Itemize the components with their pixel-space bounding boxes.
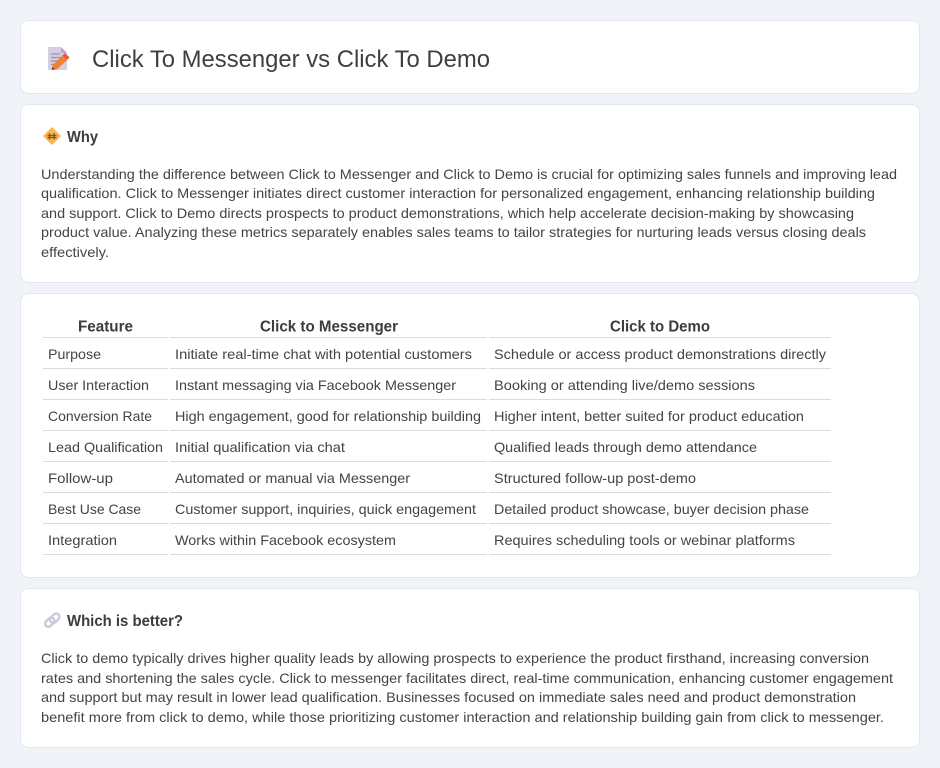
table row: conversion rate	[43, 408, 831, 430]
text block: why explanation	[41, 166, 897, 260]
table row: user interaction: User Interaction	[48, 377, 149, 393]
table row: follow-up: Automated or manual via Messenger	[175, 470, 410, 486]
table row: integration: Integration	[48, 532, 117, 548]
table row: user interaction: Booking or attending live/demo sessions	[494, 377, 755, 393]
table row: lead qualification: Initial qualification via chat	[175, 439, 345, 455]
heading: which is better: Which is better?	[67, 613, 183, 630]
table row: integration: Works within Facebook ecosystem	[175, 532, 396, 548]
table row: conversion rate: Higher intent, better suited for product education	[494, 408, 804, 424]
table row: conversion rate: Conversion Rate	[48, 408, 152, 424]
table header row: Click to Messenger	[260, 318, 398, 336]
text block: why explanation: Understanding the difference between Click to Messenger and Click to Demo is crucial for optimizing sales funnels and improving lead	[41, 166, 897, 182]
title: Click To Messenger vs Click To Demo	[92, 46, 490, 73]
table row: lead qualification	[43, 439, 831, 462]
table header row	[43, 318, 831, 338]
table row: follow-up: Follow-up	[48, 470, 113, 486]
table row: best use case	[43, 501, 831, 524]
text block: why explanation: effectively.	[41, 244, 109, 260]
text block: why explanation: product value. Analyzing these metrics separately enables sales teams to tailor strategies for nurturing leads versus closing deals	[41, 224, 866, 240]
table row: user interaction: Instant messaging via Facebook Messenger	[175, 377, 456, 393]
text block: verdict: benefit more from click to demo, while those prioritizing customer interaction and relationship building gain from click to messenger.	[41, 709, 884, 725]
table header row: Click to Demo	[610, 318, 710, 336]
table row: follow-up	[43, 470, 831, 492]
text block: verdict: and support but may result in lower lead qualification. Businesses focused on immediate sales need and product demonstration	[41, 689, 856, 705]
panel: which is better	[20, 588, 920, 748]
table row: follow-up: Structured follow-up post-demo	[494, 470, 696, 486]
icon: chain link	[44, 612, 61, 628]
table row: best use case: Customer support, inquiries, quick engagement	[175, 501, 476, 517]
panel: title header	[20, 20, 920, 94]
panel: why	[20, 104, 920, 282]
panel: comparison table	[20, 294, 920, 578]
text block: verdict	[41, 650, 893, 725]
table row: purpose: Schedule or access product demonstrations directly	[494, 346, 826, 362]
table row: purpose: Purpose	[48, 346, 101, 362]
table row: lead qualification: Lead Qualification	[48, 439, 163, 455]
table row: integration: Requires scheduling tools or webinar platforms	[494, 532, 795, 548]
table header row: Feature	[78, 318, 133, 336]
icon: document with pencil	[48, 47, 70, 70]
table row: conversion rate: High engagement, good for relationship building	[175, 408, 481, 424]
table row: lead qualification: Qualified leads through demo attendance	[494, 439, 757, 455]
text block: verdict: Click to demo typically drives higher quality leads by allowing prospects to experience the product firsthand, increasing conversion	[41, 650, 869, 666]
text block: why explanation: qualification. Click to Messenger initiates direct customer interaction for personalized engagement, enhancing relationship building	[41, 185, 875, 201]
table row: user interaction	[43, 377, 831, 400]
icon: diamond road sign	[44, 128, 60, 144]
table row: integration	[43, 532, 831, 554]
table row: best use case: Best Use Case	[48, 501, 141, 517]
table row: best use case: Detailed product showcase, buyer decision phase	[494, 501, 809, 517]
table row: purpose	[43, 346, 831, 368]
text block: why explanation: and support. Click to Demo directs prospects to product demonstrations, which help accelerate decision-making by showcasing	[41, 205, 854, 221]
text block: verdict: rates and shortening the sales cycle. Click to messenger facilitates direct, real-time communication, enhancing customer engagement	[41, 670, 893, 686]
table row: purpose: Initiate real-time chat with potential customers	[175, 346, 472, 362]
heading: why: Why	[67, 129, 98, 146]
